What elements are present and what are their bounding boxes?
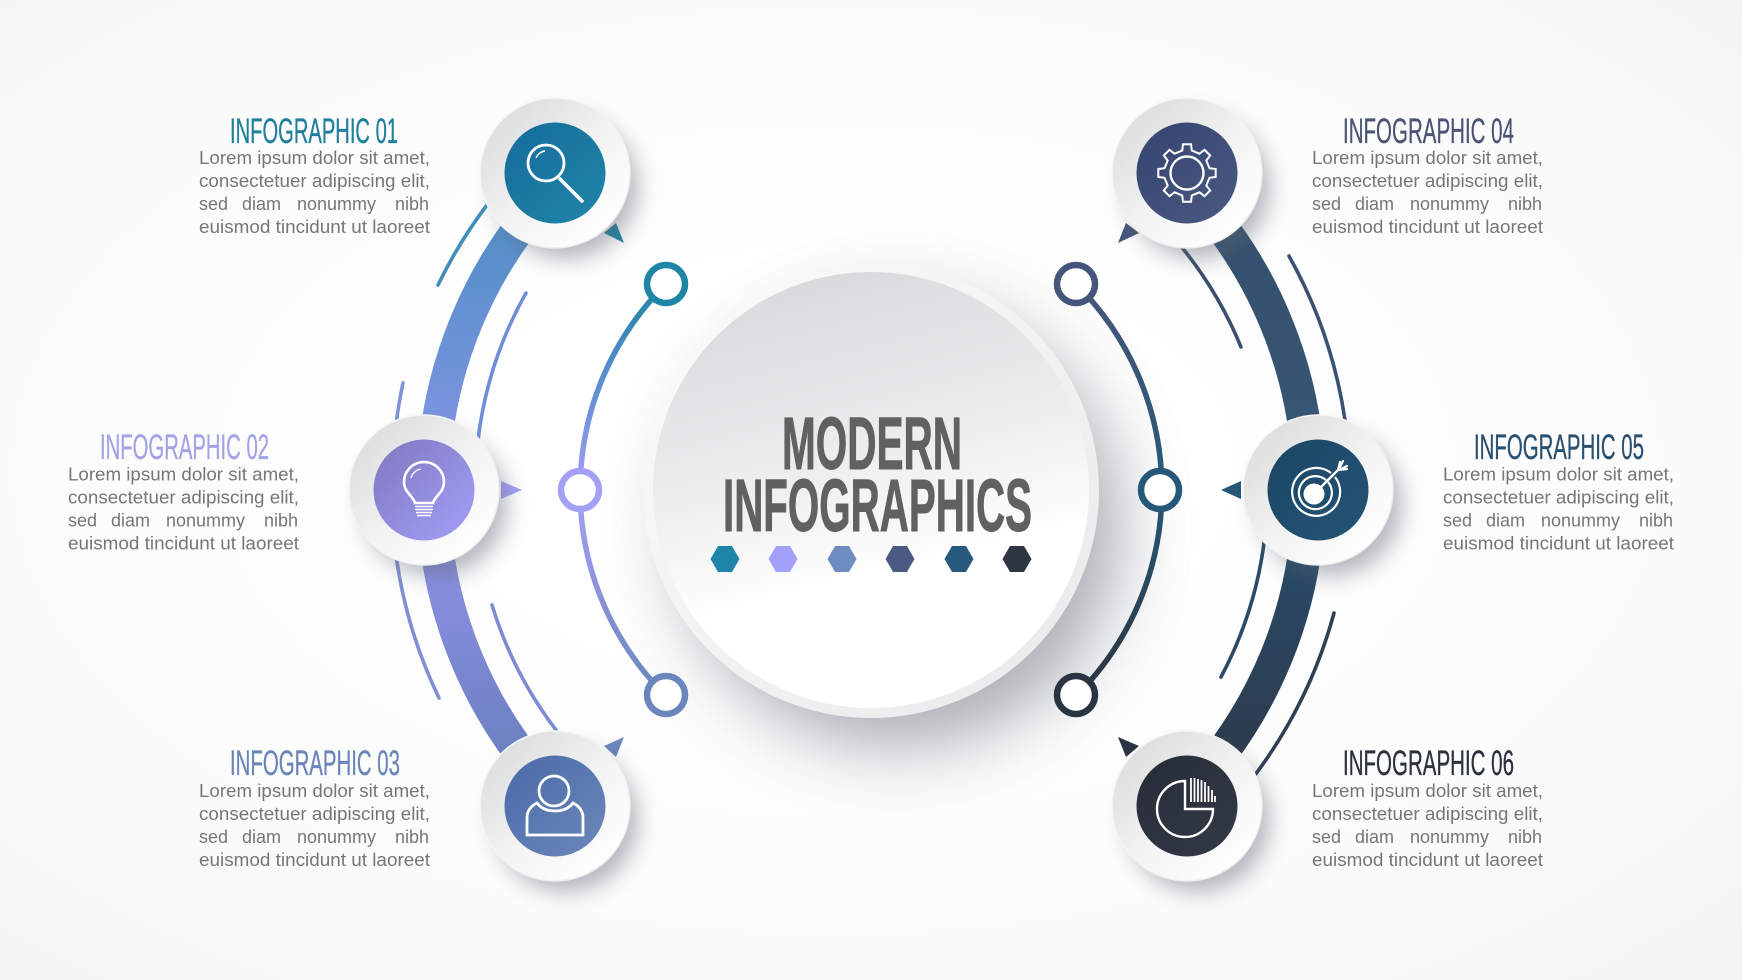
body 03 line 3: sed: [199, 827, 228, 847]
body 03 line 1: Lorem ipsum dolor sit amet,: [199, 781, 430, 801]
body 01 line 3: sed: [199, 194, 228, 214]
text block 1: [199, 112, 430, 237]
body 05 line 3: nonummy: [1541, 510, 1620, 530]
circle rim: [643, 262, 1099, 718]
shadow: central circle: [676, 304, 1120, 748]
icon: target: [1292, 461, 1347, 516]
title: [723, 402, 1032, 547]
body 02 line 3: nibh: [264, 510, 298, 530]
disc: [1136, 122, 1238, 224]
badge 6: pie chart: [1112, 731, 1270, 892]
text block 3: [199, 744, 430, 870]
thin line: lower right inner: [1221, 535, 1265, 677]
disc: [1268, 440, 1368, 540]
dish: [1243, 415, 1393, 565]
body 03 line 3: nonummy: [297, 827, 376, 847]
icon: magnifier: [528, 145, 582, 201]
pointer: [501, 481, 522, 499]
body 04 line 4: euismod tincidunt ut laoreet: [1312, 217, 1543, 237]
dish: [480, 731, 630, 881]
thin line: upper left inner: [478, 293, 526, 440]
pointer: [1221, 481, 1241, 499]
body 02 line 3: diam: [111, 510, 150, 530]
icon: user: [527, 776, 583, 835]
colour hexagons: [710, 546, 1032, 572]
body 01 line 3: nonummy: [297, 194, 376, 214]
icon: gear: [1158, 144, 1216, 202]
disc: [1136, 756, 1238, 856]
badge 4: gear: [1112, 98, 1270, 259]
pointer: [1118, 737, 1139, 757]
body 03 line 3: diam: [242, 827, 281, 847]
body 04 line 3: diam: [1355, 194, 1394, 214]
body 01 line 1: Lorem ipsum dolor sit amet,: [199, 148, 430, 168]
thin line: upper left outer: [438, 205, 487, 285]
title line 1: MODERN: [782, 402, 962, 485]
node: middle left: [561, 471, 599, 509]
heading 03: INFOGRAPHIC 03: [230, 744, 400, 783]
body 03 line 2: consectetuer adipiscing elit,: [199, 804, 430, 824]
shadow: [1126, 748, 1270, 892]
shadow: [1258, 432, 1402, 576]
body 02 line 3: sed: [68, 510, 97, 530]
body 05 line 1: Lorem ipsum dolor sit amet,: [1443, 464, 1674, 484]
pointer: [604, 737, 624, 757]
thin line: lower left outer: [396, 555, 439, 698]
badge 2: bulb: [349, 415, 522, 576]
body 04 line 1: Lorem ipsum dolor sit amet,: [1312, 148, 1543, 168]
badge 5: target: [1221, 415, 1402, 576]
hexagon 6: [1002, 546, 1032, 572]
shadow: [363, 432, 507, 576]
node: top right: [1057, 265, 1095, 303]
thin line: lower right outer: [1255, 613, 1334, 775]
body 02 line 2: consectetuer adipiscing elit,: [68, 487, 299, 507]
body 04 line 2: consectetuer adipiscing elit,: [1312, 171, 1543, 191]
pointer: [1118, 223, 1139, 243]
shadow: [1126, 115, 1270, 259]
heading 01: INFOGRAPHIC 01: [230, 112, 398, 151]
dish: [1112, 731, 1262, 881]
body 02 line 1: Lorem ipsum dolor sit amet,: [68, 464, 299, 484]
thin line: upper right inner: [1180, 245, 1241, 347]
thick band: upper left: [433, 180, 561, 490]
body 02 line 4: euismod tincidunt ut laoreet: [68, 533, 299, 553]
node: top left: [647, 265, 685, 303]
hexagon 5: [944, 546, 974, 572]
shadow: [494, 115, 638, 259]
body 05 line 4: euismod tincidunt ut laoreet: [1443, 533, 1674, 553]
left curved arcs: [396, 180, 561, 800]
right curved arcs: [1180, 180, 1345, 800]
body 06 line 3: diam: [1355, 827, 1394, 847]
node rings: [561, 265, 1179, 714]
heading 02: INFOGRAPHIC 02: [100, 428, 269, 467]
hexagon 4: [886, 546, 914, 572]
body 05 line 2: consectetuer adipiscing elit,: [1443, 487, 1674, 507]
body 01 line 3: nibh: [395, 194, 429, 214]
text block 6: [1312, 744, 1543, 870]
body 05 line 3: diam: [1486, 510, 1525, 530]
dish: [349, 415, 499, 565]
central circle: [643, 262, 1099, 718]
body 06 line 3: nonummy: [1410, 827, 1489, 847]
node: bottom right: [1057, 676, 1095, 714]
disc: [374, 440, 474, 540]
text block 4: [1312, 112, 1543, 237]
body 05 line 3: sed: [1443, 510, 1472, 530]
thin line: upper right outer: [1289, 256, 1345, 420]
body 06 line 2: consectetuer adipiscing elit,: [1312, 804, 1543, 824]
body 03 line 4: euismod tincidunt ut laoreet: [199, 850, 430, 870]
text block 2: [68, 428, 299, 553]
circle face: [653, 272, 1089, 708]
body 01 line 3: diam: [242, 194, 281, 214]
thick band: lower left: [433, 490, 561, 800]
badge 3: user: [480, 731, 638, 892]
body 06 line 3: nibh: [1508, 827, 1542, 847]
hexagon 3: [828, 546, 856, 572]
pointer: [604, 223, 624, 243]
body 04 line 3: nibh: [1508, 194, 1542, 214]
central inner arc left: [580, 284, 666, 696]
title line 2: INFOGRAPHICS: [723, 464, 1032, 547]
body 06 line 3: sed: [1312, 827, 1341, 847]
central inner arc right: [1076, 284, 1162, 696]
body 02 line 3: nonummy: [166, 510, 245, 530]
text block 5: [1443, 428, 1674, 553]
body 03 line 3: nibh: [395, 827, 429, 847]
shadow: [494, 748, 638, 892]
body 04 line 3: nonummy: [1410, 194, 1489, 214]
heading 06: INFOGRAPHIC 06: [1343, 744, 1514, 783]
thick band: lower right: [1181, 490, 1309, 800]
dish: [1112, 98, 1262, 248]
thin line: lower left inner: [492, 605, 556, 730]
body 01 line 4: euismod tincidunt ut laoreet: [199, 217, 430, 237]
thin line: far left stub: [396, 383, 403, 425]
heading 04: INFOGRAPHIC 04: [1343, 112, 1514, 151]
icon: light bulb: [404, 462, 444, 516]
thick band: upper right: [1181, 180, 1309, 490]
body 01 line 2: consectetuer adipiscing elit,: [199, 171, 430, 191]
node: bottom left: [647, 676, 685, 714]
disc: [504, 122, 606, 224]
hexagon 2: [768, 546, 798, 572]
hexagon 1: [710, 546, 740, 572]
dish: [480, 98, 630, 248]
badge 1: search: [480, 98, 638, 259]
body 06 line 4: euismod tincidunt ut laoreet: [1312, 850, 1543, 870]
disc: [504, 756, 606, 856]
node: middle right: [1141, 471, 1179, 509]
body 06 line 1: Lorem ipsum dolor sit amet,: [1312, 781, 1543, 801]
icon: pie chart: [1157, 778, 1215, 837]
body 05 line 3: nibh: [1639, 510, 1673, 530]
body 04 line 3: sed: [1312, 194, 1341, 214]
